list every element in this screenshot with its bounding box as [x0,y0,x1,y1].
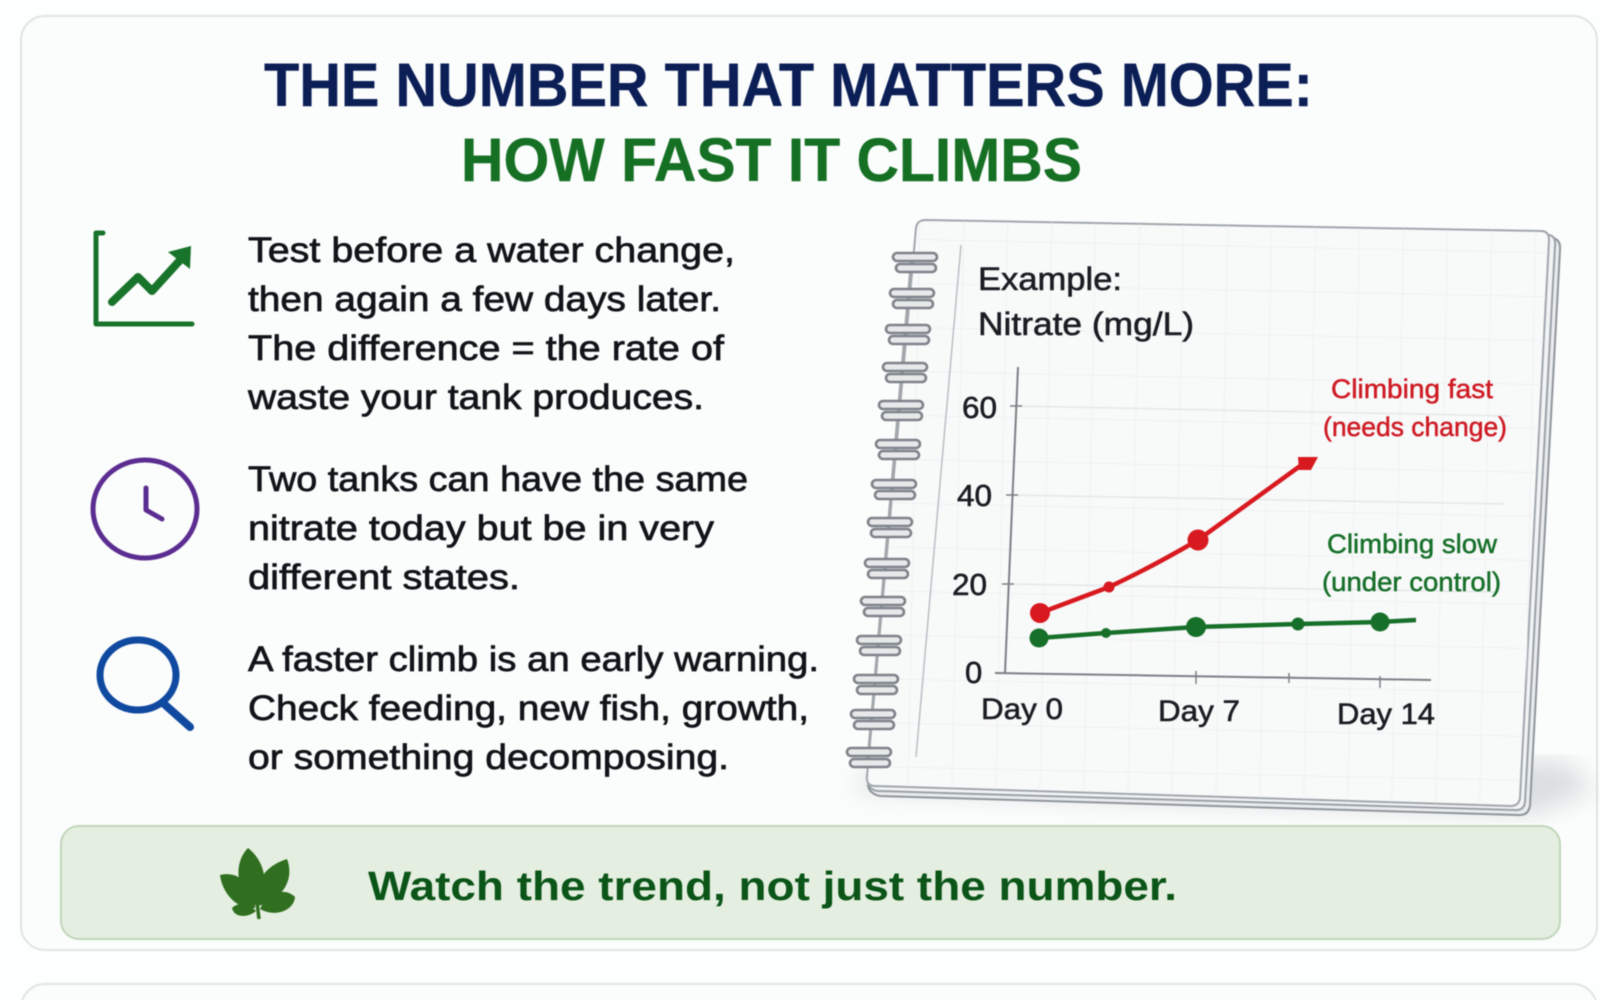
chart heading: Example: [978,261,1122,297]
x axis labels: Day 7 [1158,695,1240,728]
callout banner [61,826,1560,939]
title: THE NUMBER THAT MATTERS MORE: [264,51,1313,119]
chart axes and gridlines [995,367,1510,688]
x axis labels: Day 0 [981,693,1063,726]
text block: two tanks: different states. [248,558,520,597]
series label: climbing slow: Climbing slow [1327,529,1497,559]
y axis labels: 60 [962,390,997,425]
series label: climbing slow [1322,529,1501,597]
icon: magnifying glass [100,640,190,727]
icon: leaf [220,848,295,919]
series label: climbing slow: (under control) [1322,567,1501,597]
y axis labels: 20 [952,567,987,602]
text block: faster climb: Check feeding, new fish, growth, [248,689,809,728]
text block: test before a water change: The difference = the rate of [248,329,724,368]
text block: test before a water change: then again a few days later. [248,280,721,319]
text block: faster climb [248,640,819,777]
text block: test before a water change: Test before a water change, [248,231,735,270]
green line: climbing slow [1030,612,1416,648]
text block: faster climb: A faster climb is an early warning. [248,640,819,679]
icon: rising trend chart [96,233,192,324]
text block: test before a water change: waste your tank produces. [247,378,704,417]
spiral binding rings [847,253,937,767]
y axis labels [952,390,997,690]
red line: climbing fast [1030,457,1318,623]
banner text: Watch the trend, not just the number. [368,863,1177,909]
y axis labels: 40 [957,478,992,513]
text block: two tanks: Two tanks can have the same [248,460,748,499]
notebook with chart [840,200,1595,830]
icon: clock [93,460,197,558]
series label: climbing fast [1323,374,1507,442]
next panel (cut off at bottom edge) [21,984,1597,1000]
series label: climbing fast: (needs change) [1323,412,1507,442]
chart heading: Nitrate (mg/L) [978,306,1194,342]
text block: two tanks [248,460,748,597]
chart heading [978,261,1194,342]
text block: two tanks: nitrate today but be in very [248,509,715,548]
x axis labels: Day 14 [1337,698,1435,731]
series label: climbing fast: Climbing fast [1331,374,1494,404]
x axis labels [981,693,1435,731]
title [264,51,1313,194]
y axis labels: 0 [965,655,982,690]
text block: faster climb: or something decomposing. [248,738,729,777]
title: HOW FAST IT CLIMBS [461,126,1082,194]
text block: test before a water change [247,231,735,417]
